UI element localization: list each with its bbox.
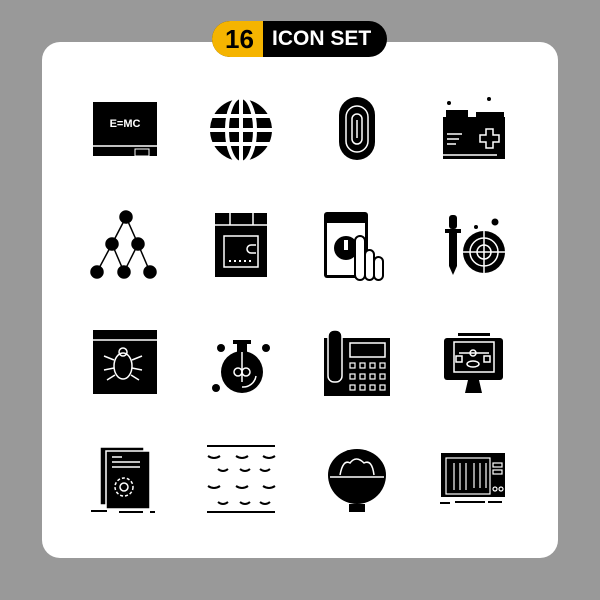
icon: blackboard E=MC	[93, 102, 157, 156]
icon: bowl with eggs	[328, 449, 386, 512]
icon: settings document	[91, 447, 155, 513]
icon: hierarchy tree	[91, 211, 156, 278]
icon: monitor scales	[444, 333, 503, 393]
icon: flask	[212, 340, 270, 393]
icon: web bug	[93, 330, 157, 394]
icon: globe	[210, 97, 272, 163]
icon: medical folder	[443, 97, 505, 159]
title pill: 16	[225, 24, 254, 54]
icon: oven	[215, 213, 267, 277]
card panel	[42, 42, 558, 558]
icon: blackboard E=MC: E=MC	[110, 118, 140, 130]
icon: water waves	[207, 446, 275, 512]
title pill	[212, 21, 387, 57]
icon: mixer console	[440, 453, 505, 504]
icon: desk telephone	[324, 330, 390, 396]
icon: dropper and target	[445, 215, 505, 275]
icon: fingerprint	[339, 97, 375, 160]
icon: phone touch	[324, 212, 383, 280]
title pill: ICON SET	[272, 27, 371, 50]
